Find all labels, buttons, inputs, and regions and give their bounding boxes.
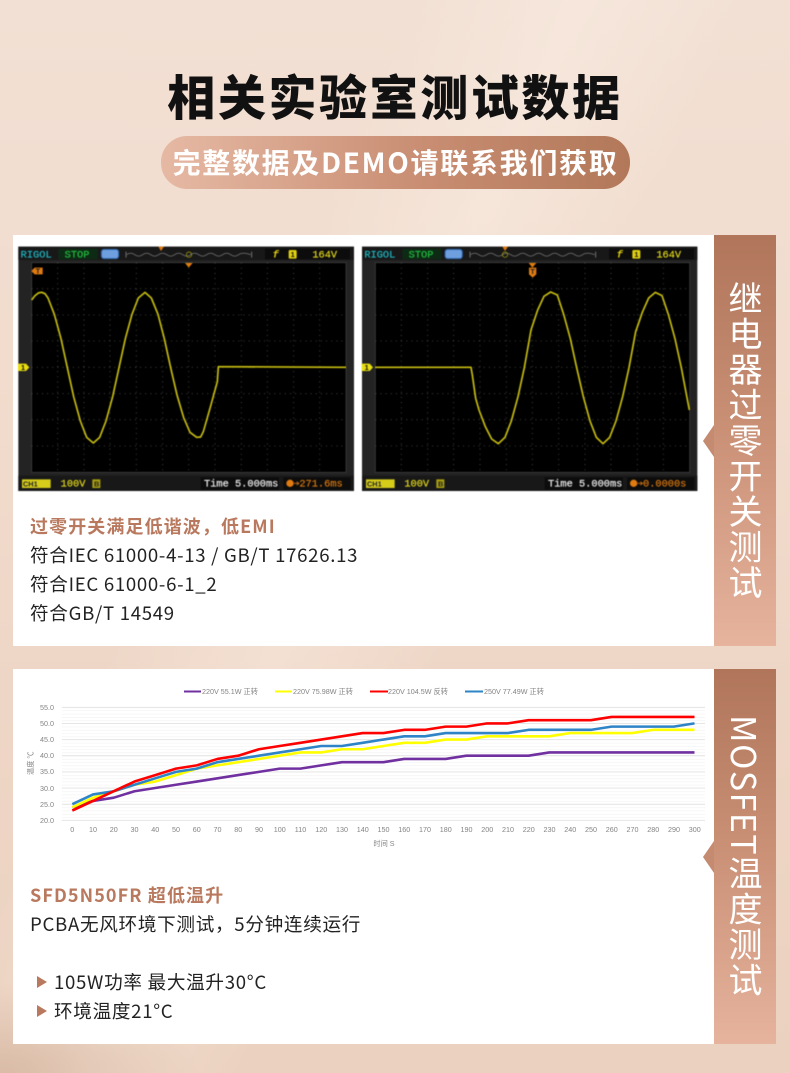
oscilloscope screenshot: turn on: f <box>617 250 624 262</box>
oscilloscope screenshot: turn on: CH1 <box>367 479 382 488</box>
oscilloscope screenshot: turn off: 1 <box>291 250 295 259</box>
x axis labels: 200 <box>481 825 493 834</box>
x axis labels: 190 <box>460 825 472 834</box>
icon: notch arrow 1 <box>703 425 714 457</box>
x axis labels: 70 <box>214 825 222 834</box>
legend: 250V 77.49W 正转 <box>484 687 544 696</box>
x axis labels: 270 <box>626 825 638 834</box>
oscilloscope screenshot: turn on: 100V <box>404 479 430 491</box>
x axis labels: 30 <box>130 825 138 834</box>
x axis labels: 40 <box>151 825 159 834</box>
oscilloscope screenshot: turn on: T <box>530 267 535 276</box>
y axis labels: 55.0 <box>40 703 54 712</box>
x axis labels: 230 <box>544 825 556 834</box>
y axis title: 温度 ℃ <box>26 751 35 775</box>
text: standard 3: 符合GB/T 14549 <box>30 599 175 626</box>
x axis labels: 150 <box>378 825 390 834</box>
title: 相关实验室测试数据 <box>167 59 623 129</box>
x axis labels: 0 <box>70 825 74 834</box>
oscilloscope screenshot: turn off: RIGOL <box>21 250 52 262</box>
x axis labels: 100 <box>274 825 286 834</box>
text: bullet 1: 105W功率 最大温升30°C <box>54 968 267 995</box>
oscilloscope screenshot: turn on: 0.0000s <box>643 479 686 491</box>
legend: 220V 104.5W 反转 <box>388 687 448 696</box>
y axis labels: 40.0 <box>40 751 54 760</box>
oscilloscope screenshot: turn on: Time 5.000ms <box>548 479 622 491</box>
oscilloscope screenshot: turn on: RIGOL <box>364 250 395 262</box>
legend <box>184 687 544 696</box>
x axis labels: 160 <box>398 825 410 834</box>
text: standard 1: 符合IEC 61000-4-13 / GB/T 17626.13 <box>30 541 358 568</box>
x axis labels: 240 <box>564 825 576 834</box>
x axis labels: 300 <box>689 825 701 834</box>
oscilloscope screenshot: turn off: 100V <box>61 479 86 491</box>
text: standard 2: 符合IEC 61000-6-1_2 <box>30 570 217 597</box>
oscilloscope screenshot: turn on: 164V <box>656 250 682 262</box>
oscilloscope screenshot: turn off: 164V <box>312 250 338 262</box>
oscilloscope screenshot: turn off: Time 5.000ms <box>204 479 278 491</box>
icon: bullet 2 <box>37 1005 47 1017</box>
side label: relay zero-crossing test: 继电器过零开关测试 <box>721 281 770 600</box>
x axis labels: 130 <box>336 825 348 834</box>
x axis labels: 90 <box>255 825 263 834</box>
x axis labels: 50 <box>172 825 180 834</box>
oscilloscope screenshot: turn off: T <box>36 266 41 275</box>
y axis labels: 20.0 <box>40 816 54 825</box>
icon: notch arrow 2 <box>703 841 714 873</box>
x axis labels: 170 <box>419 825 431 834</box>
y axis labels: 50.0 <box>40 719 54 728</box>
x axis labels: 290 <box>668 825 680 834</box>
x axis labels: 250 <box>585 825 597 834</box>
y axis labels <box>40 703 54 825</box>
legend: 220V 75.98W 正转 <box>293 687 353 696</box>
oscilloscope screenshot: turn off: B <box>94 479 99 488</box>
oscilloscope screenshot: turn on: 1 <box>634 250 638 259</box>
oscilloscope screenshot: turn off: 271.6ms <box>299 479 343 491</box>
y axis labels: 25.0 <box>40 800 54 809</box>
x axis labels <box>70 825 701 834</box>
side band: MOSFET temperature test <box>714 669 776 1044</box>
x axis labels: 220 <box>523 825 535 834</box>
oscilloscope screenshot: turn on: 1 <box>365 363 369 372</box>
oscilloscope screenshot: turn on: STOP <box>409 250 433 262</box>
heading: low temperature rise: SFD5N50FR 超低温升 <box>30 882 224 908</box>
x axis labels: 280 <box>647 825 659 834</box>
side label: MOSFET temperature test: MOSFET温度测试 <box>721 715 770 998</box>
side band: relay zero-crossing test <box>714 235 776 646</box>
y axis labels: 30.0 <box>40 784 54 793</box>
x axis labels: 210 <box>502 825 514 834</box>
x axis labels: 260 <box>606 825 618 834</box>
legend: 220V 55.1W 正转 <box>202 687 258 696</box>
x axis title: 时间 S <box>373 839 395 848</box>
y axis labels: 45.0 <box>40 735 54 744</box>
x axis labels: 20 <box>110 825 118 834</box>
x axis labels: 10 <box>89 825 97 834</box>
oscilloscope screenshot: turn off: STOP <box>65 250 89 262</box>
oscilloscope screenshot: turn off: f <box>273 250 280 262</box>
text: test condition: PCBA无风环境下测试，5分钟连续运行 <box>30 910 361 937</box>
heading: low harmonics: 过零开关满足低谐波，低EMI <box>30 513 276 539</box>
subtitle pill: 完整数据及DEMO请联系我们获取 <box>173 142 618 182</box>
y axis labels: 35.0 <box>40 767 54 776</box>
oscilloscope screenshot: turn off: CH1 <box>23 479 38 488</box>
icon: bullet 1 <box>37 976 47 988</box>
data lines <box>72 717 695 811</box>
panel: MOSFET temperature test <box>13 669 714 1044</box>
oscilloscope screenshot: turn on: B <box>438 479 443 488</box>
x axis labels: 110 <box>295 825 306 834</box>
x axis labels: 60 <box>193 825 201 834</box>
x axis labels: 80 <box>234 825 242 834</box>
panel: relay zero-crossing test <box>13 235 714 646</box>
line chart: temperature over time <box>26 687 705 848</box>
oscilloscope screenshot: turn on <box>360 246 698 492</box>
oscilloscope screenshot: turn off <box>17 246 355 492</box>
x axis labels: 140 <box>357 825 369 834</box>
oscilloscope screenshot: turn off: 1 <box>21 363 25 372</box>
x axis labels: 180 <box>440 825 452 834</box>
text: bullet 2: 环境温度21°C <box>54 997 173 1024</box>
x axis labels: 120 <box>315 825 327 834</box>
